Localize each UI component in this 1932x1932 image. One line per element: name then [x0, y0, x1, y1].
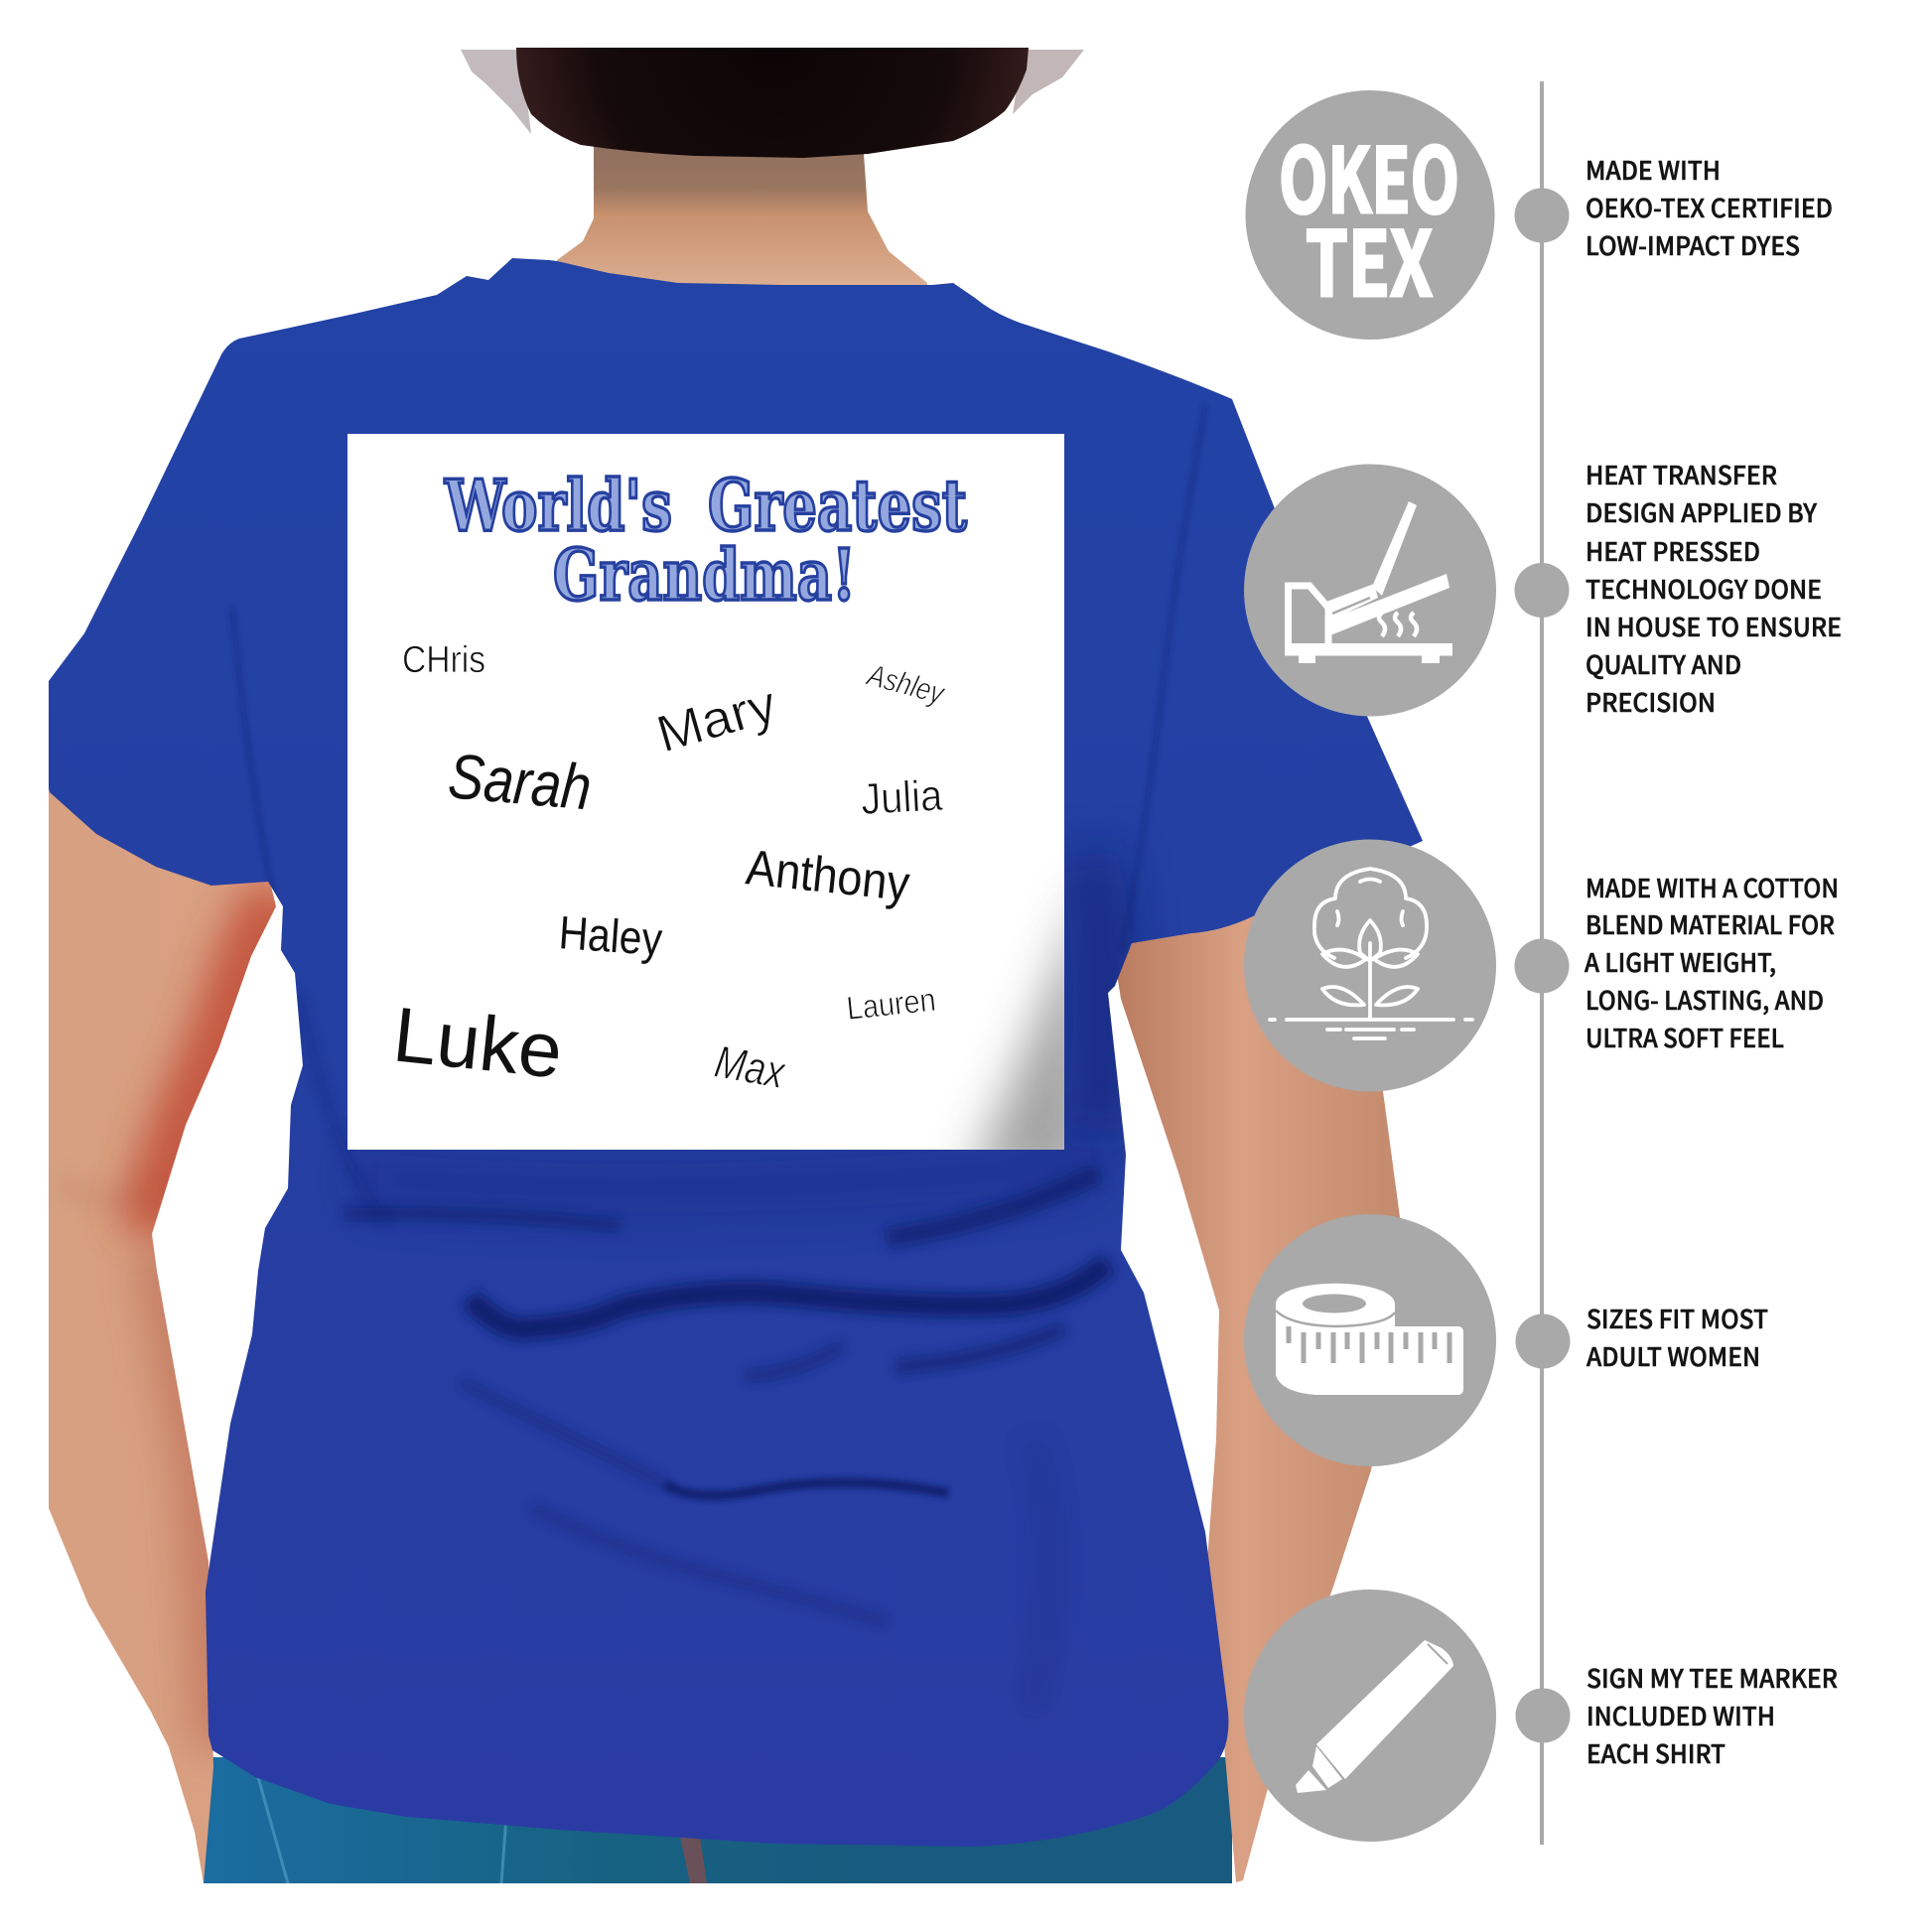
text block: OEKO-TEX dyes: LOW-IMPACT DYES	[1586, 226, 1800, 263]
text block: cotton blend: BLEND MATERIAL FOR	[1586, 905, 1835, 942]
text block: heat transfer	[1586, 456, 1842, 720]
signature: Mary: Mary	[650, 675, 783, 764]
text block: cotton blend: ULTRA SOFT FEEL	[1586, 1019, 1784, 1055]
right arm	[1112, 874, 1400, 1882]
signature: Haley: Haley	[557, 905, 664, 965]
photo: woman seen from behind wearing the t-shirt	[49, 48, 1423, 1883]
signature: Lauren: Lauren	[845, 981, 937, 1027]
text block: heat transfer: HEAT TRANSFER	[1586, 456, 1777, 492]
timeline dot 2	[1515, 563, 1569, 618]
t-shirt	[49, 258, 1423, 1847]
text block: heat transfer: QUALITY AND	[1586, 645, 1741, 682]
text block: sizes: ADULT WOMEN	[1587, 1337, 1760, 1374]
text block: heat transfer: DESIGN APPLIED BY	[1586, 493, 1818, 530]
tape ticks	[1289, 1326, 1449, 1363]
text block: sizes	[1587, 1300, 1768, 1374]
timeline dot 5	[1515, 1688, 1571, 1743]
signature: Julia: Julia	[860, 771, 944, 824]
text block: cotton blend	[1585, 869, 1839, 1055]
signature: Chris: CHris	[402, 639, 485, 681]
icon: OEKO-TEX badge: TEX	[1306, 193, 1433, 322]
icon: OEKO-TEX badge	[1245, 90, 1495, 340]
hair	[461, 48, 1084, 158]
neck	[557, 139, 927, 293]
signature: Anthony: Anthony	[744, 839, 912, 911]
signature: Sarah: Sarah	[446, 740, 595, 823]
timeline dot 3	[1515, 939, 1569, 993]
title: World's	[444, 464, 672, 547]
icon: cotton plant	[1244, 840, 1496, 1092]
timeline dot 4	[1515, 1314, 1571, 1368]
text block: heat transfer: HEAT PRESSED	[1586, 532, 1760, 569]
text block: OEKO-TEX dyes	[1586, 151, 1833, 263]
title	[443, 475, 968, 603]
signature: Luke: Luke	[389, 990, 566, 1095]
text block: marker: INCLUDED WITH	[1587, 1697, 1775, 1733]
jeans	[204, 1757, 1232, 1883]
icon: measuring tape	[1244, 1214, 1496, 1466]
title: Grandma!	[553, 533, 856, 617]
shirt shading and folds	[232, 405, 1205, 1708]
text block: marker: EACH SHIRT	[1587, 1734, 1725, 1771]
text block: marker	[1587, 1659, 1838, 1771]
icon: marker pen	[1244, 1589, 1496, 1842]
text block: cotton blend: A LIGHT WEIGHT,	[1585, 943, 1776, 980]
text block: heat transfer: PRECISION	[1586, 683, 1716, 720]
text block: heat transfer: IN HOUSE TO ENSURE	[1586, 608, 1842, 644]
icon: heat press	[1244, 465, 1496, 717]
print panel	[347, 434, 1092, 1181]
title: Greatest	[708, 464, 967, 547]
text block: sizes: SIZES FIT MOST	[1587, 1300, 1768, 1336]
text block: heat transfer: TECHNOLOGY DONE	[1586, 570, 1822, 607]
text block: marker: SIGN MY TEE MARKER	[1587, 1659, 1838, 1696]
text block: cotton blend: MADE WITH A COTTON	[1586, 869, 1839, 905]
vertical timeline	[1515, 81, 1571, 1845]
text block: OEKO-TEX dyes: MADE WITH	[1586, 151, 1721, 188]
icon: OEKO-TEX badge: OKEO	[1279, 109, 1459, 238]
signature: Max: Max	[711, 1035, 790, 1098]
signature: Ashley: Ashley	[863, 657, 950, 711]
text block: OEKO-TEX dyes: OEKO-TEX CERTIFIED	[1586, 189, 1833, 225]
panel corner shadow	[953, 894, 1064, 1150]
left arm	[49, 774, 283, 1883]
timeline dot 1	[1515, 189, 1569, 242]
text block: cotton blend: LONG- LASTING, AND	[1586, 981, 1824, 1018]
